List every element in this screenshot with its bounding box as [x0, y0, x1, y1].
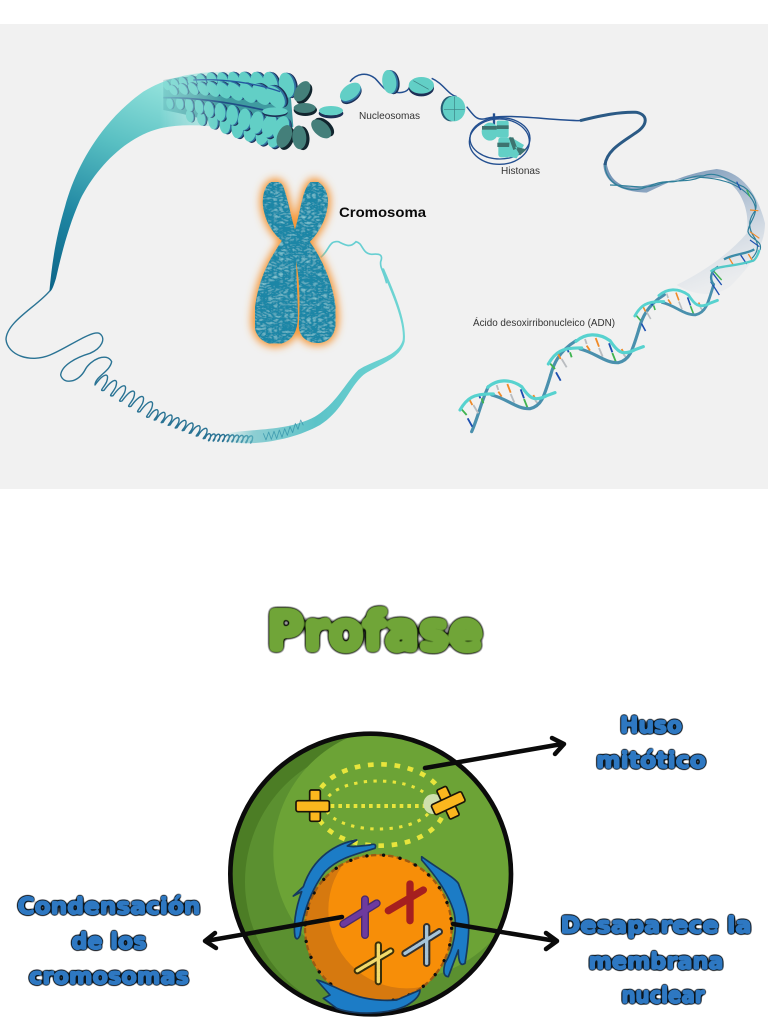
ribbon coil fine detail	[263, 420, 303, 440]
mitotic spindle	[315, 764, 445, 846]
cell diagram	[223, 727, 527, 1023]
label: Nucleosomas: Nucleosomas	[359, 110, 420, 122]
histones circle	[469, 113, 530, 164]
nucleosomes, histones and DNA	[336, 69, 765, 432]
linker DNA wire	[350, 74, 580, 121]
label: Huso mitótico	[596, 713, 706, 774]
panel: chromosome background	[0, 24, 768, 489]
DNA band shading	[603, 163, 765, 294]
small rungs	[737, 182, 759, 247]
chromatin fibre and coil	[6, 72, 405, 443]
nucleus	[304, 854, 454, 1000]
label: ADN: Ácido desoxirribonucleico (ADN)	[473, 316, 615, 329]
faded disc rows	[162, 69, 300, 151]
nucleosome: cross disc	[441, 96, 465, 121]
title: Profase: Profase	[267, 600, 483, 663]
label: Huso mitótico: Huso	[620, 713, 682, 739]
label: Condensación de los cromosomas: Condensación	[18, 894, 200, 920]
lower DNA helix waves	[460, 284, 717, 427]
label: Condensación de los cromosomas: de los	[72, 929, 146, 955]
right centriole	[426, 781, 470, 824]
thick chromatin band	[49, 72, 253, 292]
arrow: membrana nuclear	[453, 924, 557, 949]
DNA helix rising strand segments	[472, 295, 664, 432]
label: Desaparece la membrana nuclear	[560, 913, 752, 1009]
endoplasmic reticulum	[293, 840, 469, 1013]
nucleosome discs	[336, 69, 401, 108]
label: Condensación de los cromosomas: cromosomas	[29, 964, 189, 990]
cell membrane outline	[230, 734, 511, 1014]
thick dark fibre section	[580, 112, 645, 165]
thin coiled wire	[6, 291, 253, 443]
turquoise ribbon to chromosome	[227, 268, 405, 443]
label: Desaparece la membrana nuclear: membrana	[588, 949, 724, 975]
label: Condensación de los cromosomas	[18, 894, 200, 990]
label: Desaparece la membrana nuclear: Desaparece la	[560, 913, 752, 939]
nucleosome fan	[162, 69, 343, 152]
label: Cromosoma: Cromosoma	[339, 205, 427, 220]
cell body	[232, 736, 509, 1009]
label: Desaparece la membrana nuclear: nuclear	[622, 983, 705, 1009]
nuclear chromosome: yellow	[357, 945, 391, 982]
left centriole	[296, 790, 329, 821]
nuclear chromosome: red	[388, 884, 423, 921]
nucleosome: flat disc	[409, 77, 434, 96]
fourth DNA turn	[711, 249, 759, 295]
upper thin helix	[605, 165, 761, 258]
chromosome body	[255, 182, 335, 343]
arrow: condensación	[205, 917, 342, 948]
dark core discs	[262, 78, 343, 152]
centrosome glow	[423, 794, 443, 814]
nuclear chromosome: purple	[343, 899, 377, 935]
thin wire end into chromosome	[321, 242, 387, 283]
arrow: huso mitótico	[425, 738, 564, 768]
orange glow	[255, 182, 335, 343]
label: Histonas: Histonas	[501, 165, 540, 177]
icon: chromosome	[255, 182, 335, 343]
label: Huso mitótico: mitótico	[596, 748, 706, 774]
nuclear chromosome: blue-grey	[405, 927, 439, 963]
